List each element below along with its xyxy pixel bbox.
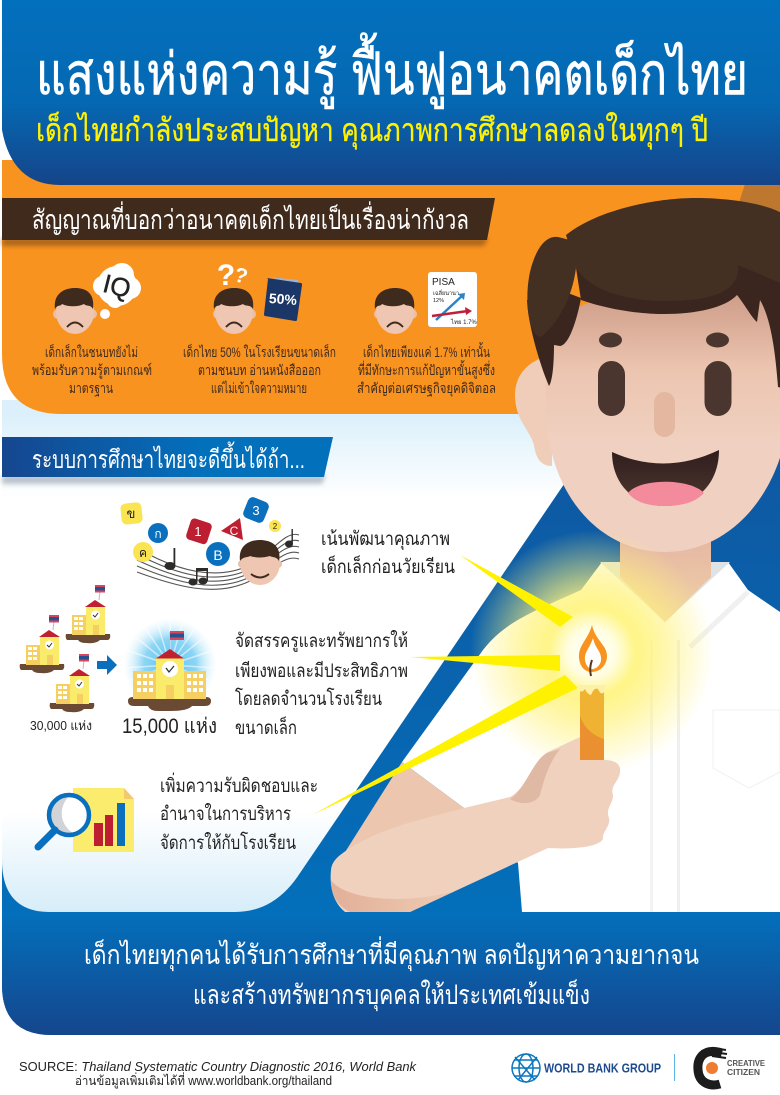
icon: early childhood music and letters: 1 bbox=[194, 524, 202, 539]
eyebrows bbox=[599, 332, 729, 348]
logo: World Bank Group bbox=[512, 1054, 661, 1082]
arrow: schools consolidate bbox=[97, 655, 117, 675]
icon: sad child with PISA chart: ไทย 1.7% bbox=[450, 318, 477, 326]
label: 30,000 schools: 30,000 แห่ง bbox=[30, 718, 92, 733]
icon: early childhood music and letters: ข bbox=[127, 506, 135, 521]
caption: reading without understanding: เด็กไทย 50% ในโรงเรียนขนาดเล็ก bbox=[183, 343, 336, 360]
text: responsibility and authority bbox=[160, 772, 318, 854]
caption: reading without understanding: ตามชนบท อ่านหนังสือออก bbox=[198, 362, 321, 378]
caption: PISA skills bbox=[357, 342, 496, 397]
text: early childhood quality bbox=[321, 529, 455, 578]
panel: header bbox=[2, 0, 780, 185]
eyes bbox=[598, 361, 732, 416]
caption: PISA skills: สำคัญต่อเศรษฐกิจยุคดิจิตอล bbox=[357, 380, 496, 397]
caption: PISA skills: ที่มีทักษะการแก้ปัญหาขั้นสูงซึ่ง bbox=[358, 360, 495, 379]
candle bbox=[577, 685, 606, 760]
label: 15,000 schools: 15,000 แห่ง bbox=[122, 715, 217, 738]
icon: early childhood music and letters: B bbox=[213, 547, 223, 563]
text: allocate teachers and resources: จัดสรรครูและทรัพยากรให้ bbox=[235, 630, 408, 652]
heading banner: warning signs: สัญญาณที่บอกว่าอนาคตเด็กไทยเป็นเรื่องน่ากังวล bbox=[32, 201, 469, 235]
collar back bbox=[600, 562, 730, 622]
text: allocate teachers and resources bbox=[235, 630, 408, 739]
icon: sad child with IQ cloud bbox=[53, 263, 141, 334]
text: allocate teachers and resources: เพียงพอและมีประสิทธิภาพ bbox=[235, 660, 408, 682]
logo: Creative Citizen bbox=[698, 1048, 766, 1085]
icon: sad child with PISA chart: 12% bbox=[433, 298, 444, 304]
logo: Creative Citizen: CREATIVE bbox=[727, 1059, 766, 1068]
source text: อ่านข้อมูลเพิ่มเติมได้ที่ www.worldbank.org/thailand bbox=[75, 1072, 332, 1089]
panel: bottom conclusion band bbox=[2, 912, 780, 1035]
icon: sad child with PISA chart bbox=[374, 272, 477, 334]
hair bbox=[527, 198, 780, 388]
icon: sad child with PISA chart: PISA bbox=[432, 277, 455, 288]
shirt details: placket and pocket bbox=[650, 592, 780, 912]
icon: sad child with PISA chart: เฉลี่ยนานา bbox=[433, 289, 459, 297]
caption: rural readiness bbox=[32, 343, 152, 397]
logo: World Bank Group: WORLD BANK GROUP bbox=[544, 1062, 661, 1076]
panel: orange warning section bbox=[2, 160, 780, 414]
text: responsibility and authority: จัดการให้กับโรงเรียน bbox=[160, 831, 296, 854]
caption: rural readiness: เด็กเล็กในชนบทยังไม่ bbox=[45, 343, 138, 360]
icon: three small schools bbox=[20, 585, 110, 712]
ear bbox=[515, 355, 552, 466]
icon: sad child with IQ cloud: IQ bbox=[100, 268, 134, 304]
text: allocate teachers and resources: ขนาดเล็ก bbox=[235, 715, 297, 739]
caption: PISA skills: เด็กไทยเพียงแค่ 1.7% เท่านั้น bbox=[363, 342, 490, 360]
caption: reading without understanding bbox=[183, 343, 336, 396]
text: responsibility and authority: อำนาจในการบริหาร bbox=[160, 803, 291, 825]
logo: Creative Citizen: CITIZEN bbox=[727, 1068, 760, 1077]
arm and hand bbox=[331, 737, 620, 912]
caption: rural readiness: มาตรฐาน bbox=[69, 380, 113, 397]
caption: rural readiness: พร้อมรับความรู้ตามเกณฑ์ bbox=[32, 362, 152, 379]
shirt bbox=[402, 562, 780, 912]
mouth bbox=[612, 450, 719, 506]
icon: sad child with question marks and book bbox=[213, 259, 302, 334]
flame bbox=[579, 625, 607, 676]
icon: sad child with question marks and book: ? bbox=[232, 263, 250, 289]
icon: early childhood music and letters: C bbox=[230, 524, 239, 538]
icon: early childhood music and letters: ก bbox=[154, 527, 162, 541]
text: allocate teachers and resources: โดยลดจำนวนโรงเรียน bbox=[235, 687, 382, 710]
heading banner: warning signs bbox=[2, 198, 495, 246]
light rays bbox=[312, 555, 578, 815]
icon: early childhood music and letters: 3 bbox=[252, 503, 260, 518]
text: conclusion message: และสร้างทรัพยากรบุคคลให้ประเทศเข้มแข็ง bbox=[193, 977, 590, 1012]
icon: magnifier over report bbox=[38, 788, 134, 852]
icon: early childhood music and letters: 2 bbox=[273, 522, 278, 531]
icon: early childhood music and letters bbox=[120, 496, 299, 589]
icon: sad child with question marks and book: ? bbox=[217, 259, 235, 292]
source text: SOURCE: Thailand Systematic Country Diagnostic 2016, World Bank bbox=[19, 1059, 417, 1074]
nose bbox=[654, 392, 675, 437]
face bbox=[546, 270, 780, 552]
caption: reading without understanding: แต่ไม่เข้าใจความหมาย bbox=[211, 380, 307, 396]
icon: large consolidated school with rays bbox=[123, 616, 217, 712]
heading banner: education could improve if bbox=[2, 437, 333, 484]
text: conclusion message bbox=[84, 936, 699, 1012]
icon: sad child with question marks and book: 50% bbox=[268, 290, 298, 308]
neck bbox=[620, 530, 711, 622]
icon: early childhood music and letters: ค bbox=[139, 546, 147, 560]
character: boy holding candle bbox=[312, 198, 780, 912]
glow bbox=[470, 530, 714, 774]
text: early childhood quality: เด็กเล็กก่อนวัยเรียน bbox=[321, 554, 455, 578]
heading banner: education could improve if: ระบบการศึกษาไทยจะดีขึ้นได้ถ้า... bbox=[32, 441, 305, 474]
decorative brown corner bbox=[730, 184, 780, 230]
source text bbox=[19, 1059, 417, 1089]
text: early childhood quality: เน้นพัฒนาคุณภาพ bbox=[321, 529, 450, 551]
divider bbox=[674, 1054, 675, 1081]
panel: light background with blue diagonal bbox=[2, 400, 780, 1035]
text: responsibility and authority: เพิ่มความรับผิดชอบและ bbox=[160, 772, 318, 797]
